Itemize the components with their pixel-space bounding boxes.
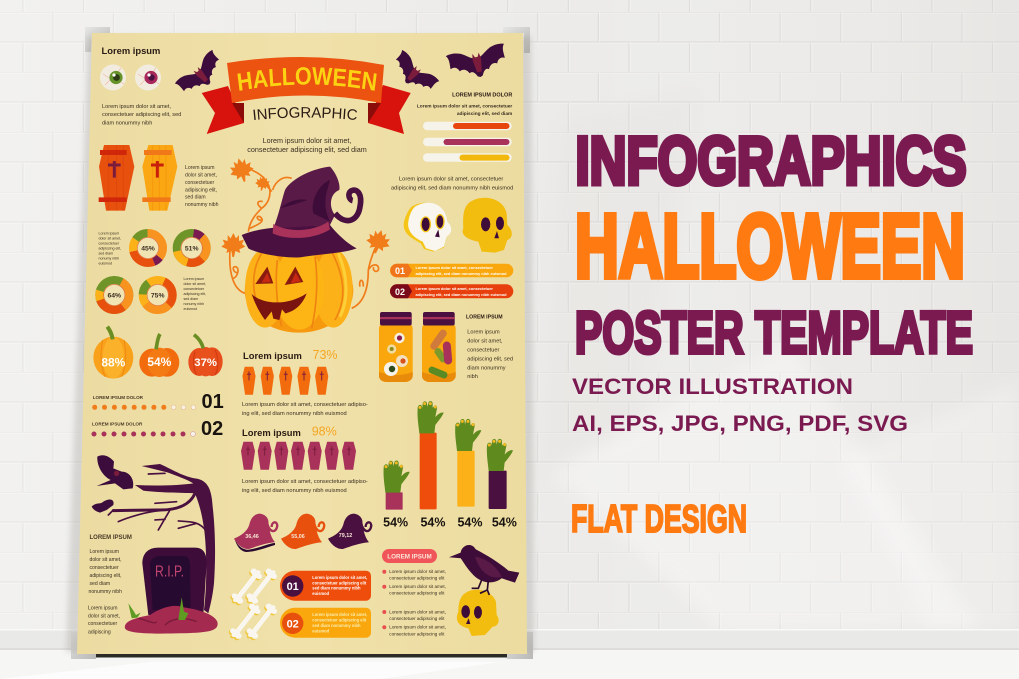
donut caption right: sed diam — [184, 297, 198, 301]
pumpkin 54%: 54% — [147, 355, 172, 369]
poster shadow — [66, 36, 534, 652]
subtitle body text: Lorem ipsum dolor sit amet, — [263, 136, 351, 145]
donut caption left: Lorem ipsum — [98, 232, 119, 236]
jar text: diam nonummy — [467, 365, 506, 371]
maple leaves — [221, 155, 393, 257]
crow on skull — [449, 545, 519, 636]
info pill 02: 02 — [395, 287, 405, 297]
pumpkin body — [245, 247, 353, 333]
bullets — [382, 570, 386, 629]
witch hat stats — [234, 514, 371, 552]
orange dots — [92, 405, 196, 410]
tree side text: nonummy nibh — [88, 589, 122, 595]
banner title text — [238, 67, 377, 91]
crow — [449, 545, 519, 595]
jar text: LOREM IPSUM — [466, 314, 503, 320]
info pill 01 — [390, 264, 513, 277]
section: 73% coffins: Lorem ipsum — [243, 350, 302, 361]
bar labels: 54% — [383, 516, 408, 530]
tree — [108, 464, 215, 613]
donut caption right: adipiscing elit, — [184, 292, 206, 296]
donut 45% — [133, 233, 163, 263]
bar labels: 54% — [492, 516, 517, 530]
numbered pill 01: euismod — [312, 591, 330, 596]
coffin text: sed diam — [185, 194, 206, 200]
bullet list panel — [382, 549, 446, 636]
donut caption left: consectetuer — [98, 242, 120, 246]
numbered pill 02 — [280, 608, 371, 638]
numbered pill 02: consectetuer adipiscing elit — [312, 617, 367, 622]
burial mound and grass — [125, 597, 218, 634]
section: 98% coffins: Lorem ipsum — [242, 427, 301, 438]
bones — [226, 566, 279, 642]
donut caption left: sed diam — [98, 252, 113, 256]
text above skulls — [391, 176, 513, 192]
donut caption right: euismod — [184, 307, 197, 311]
numbered pill 01: Lorem ipsum dolor sit amet, — [312, 575, 367, 580]
title banner — [202, 57, 411, 134]
jar text: adipiscing elit, sed — [467, 356, 513, 362]
donut labels — [107, 246, 199, 300]
numbered pill 02: Lorem ipsum dolor sit amet, — [312, 612, 367, 617]
intro text: diam nonummy nibh — [102, 120, 152, 126]
hat 36,46 — [234, 514, 277, 552]
tree side text: consectetuer — [90, 565, 119, 571]
numbered pill 02: sed diam nonummy nibh — [312, 623, 361, 628]
coffin text: nonummy nibh — [185, 202, 219, 208]
jar text — [466, 314, 513, 380]
tree with bats and gravestone — [92, 455, 218, 634]
tree side text: Lorem ipsum — [90, 549, 119, 555]
numbered pill 01: sed diam nonummy nibh — [312, 586, 361, 591]
info pill 02: Lorem ipsum dolor sit amet, consectetuer — [416, 286, 493, 291]
bar labels: 54% — [457, 516, 482, 530]
jar text: consectetuer — [467, 347, 499, 353]
yellow skull — [463, 198, 512, 253]
bullet list panel: LOREM IPSUM — [387, 554, 432, 560]
eyeball magenta — [135, 64, 161, 90]
top-right progress panel — [417, 93, 512, 162]
tree side text: dolor sit amet, — [90, 557, 122, 563]
section: 73% coffins: ing elit, sed diam nonummy nibh euismod — [242, 411, 347, 417]
red coffin — [99, 145, 134, 211]
vines and main pumpkin with witch hat — [221, 155, 393, 333]
donut caption right: Lorem ipsum — [184, 277, 204, 281]
numbered pill 02: euismod — [312, 628, 330, 634]
section: 98% coffins — [241, 425, 368, 494]
donut caption right: consectetuer — [184, 287, 205, 291]
donut labels: 75% — [151, 292, 165, 300]
top-right progress panel: Lorem ipsum dolor sit amet, consectetuer — [417, 104, 512, 110]
eyeball green — [100, 64, 126, 90]
bullet list panel: Lorem ipsum dolor sit amet, — [389, 609, 446, 614]
info pill 02: adipiscing elit, sed diam nonummy nibh euismod — [416, 292, 507, 297]
intro text: consectetuer adipiscing elit, sed — [102, 112, 181, 118]
intro text: Lorem ipsum dolor sit amet, — [102, 104, 171, 110]
bar labels: 54% — [420, 516, 445, 530]
numbered pill 01 — [280, 571, 371, 601]
donut caption left: euismod — [98, 262, 112, 266]
orange coffin row — [242, 367, 328, 395]
donut caption right: dolor sit amet, — [184, 282, 206, 286]
info pill 01: Lorem ipsum dolor sit amet, consectetuer — [416, 265, 493, 270]
donut caption left: nonumy nibh — [98, 256, 119, 260]
bullet list panel: Lorem ipsum dolor sit amet, — [389, 584, 446, 589]
banner title text: HALLOWEEN — [238, 67, 377, 91]
tree side text: consectetuer — [88, 621, 117, 627]
text above skulls: adipiscing elit, sed diam nonummy nibh euismod — [391, 186, 513, 192]
vines — [230, 170, 379, 308]
donut caption left: dolor sit amet, — [98, 236, 121, 240]
witch hat — [242, 167, 361, 257]
donut centres — [104, 237, 202, 306]
bullet list panel: consectetuer adipiscing elit — [389, 631, 445, 636]
tree side text — [88, 535, 132, 636]
flat design label: FLAT DESIGN — [571, 498, 747, 541]
yellow skull — [457, 590, 499, 636]
coffin text: Lorem ipsum — [185, 165, 214, 171]
banner subtitle: INFOGRAPHIC — [253, 107, 357, 120]
gravestone — [142, 548, 207, 615]
donut caption left — [98, 232, 121, 266]
witch hat stats: 36,46 — [245, 534, 259, 540]
jar with fingers — [422, 312, 456, 382]
pumpkin face — [252, 267, 307, 320]
donut 64% — [99, 280, 129, 310]
icon: bat left — [174, 49, 228, 101]
gravestone: R.I.P. — [155, 564, 184, 581]
tree side text: LOREM IPSUM — [90, 535, 132, 541]
tree side text: dolor sit amet, — [88, 614, 120, 620]
tree side text: adipiscing — [88, 630, 111, 636]
numbered pill 01: 01 — [287, 581, 299, 593]
dotted rating rows: LOREM IPSUM DOLOR — [92, 422, 143, 426]
bars — [386, 433, 507, 510]
intro text — [102, 104, 181, 126]
dotted rating rows: 01 — [202, 391, 224, 413]
donut labels: 51% — [185, 246, 199, 252]
subtitle body text — [247, 136, 367, 154]
top-left heading and eyes — [100, 45, 181, 126]
coffin text: dolor sit amet, — [185, 172, 217, 178]
coffin text: adipiscing elit, — [185, 188, 217, 194]
magenta coffin row — [241, 442, 356, 470]
coffin text: consectetuer — [185, 180, 214, 186]
skulls — [404, 198, 512, 253]
icon: bat middle right — [387, 49, 440, 99]
bat on branch — [92, 455, 133, 513]
bullet list panel: Lorem ipsum dolor sit amet, — [389, 625, 446, 630]
coffins panel — [99, 145, 219, 211]
hat 55,06 — [281, 514, 324, 549]
specimen jars — [379, 312, 513, 382]
bullet list panel: consectetuer adipiscing elit — [389, 591, 445, 596]
dotted rating rows — [92, 391, 224, 440]
section: 73% coffins: Lorem ipsum dolor sit amet, consectetuer adipiso- — [242, 402, 368, 408]
section: 73% coffins: 73% — [312, 348, 338, 362]
pumpkin 88%: 88% — [101, 356, 126, 370]
small pumpkins with percentages — [93, 327, 223, 379]
subtitle: file formats: AI, EPS, JPG, PNG, PDF, SVG — [572, 411, 908, 436]
dotted rating rows: LOREM IPSUM DOLOR — [93, 395, 144, 400]
baseboard and floor — [0, 629, 1019, 679]
tree side text: adipiscing elit, — [90, 573, 122, 579]
tree side text: Lorem ipsum — [88, 606, 117, 612]
subtitle body text: consectetuer adipiscing elit, sed diam — [247, 145, 367, 154]
donut caption right — [184, 277, 206, 311]
section: 98% coffins: 98% — [312, 425, 337, 439]
pumpkin 37%: 37% — [194, 357, 217, 369]
section: 73% coffins — [242, 348, 368, 417]
info pill 02 — [390, 284, 513, 298]
bullet list panel: consectetuer adipiscing elit — [389, 576, 445, 581]
bullet list panel: Lorem ipsum dolor sit amet, — [389, 569, 446, 574]
zombie hand bar chart — [383, 401, 517, 530]
hat 79,12 — [328, 514, 371, 549]
white skull — [404, 203, 451, 252]
progress bars — [423, 122, 512, 162]
top-right progress panel: adipiscing elit, sed diam — [457, 111, 512, 117]
banner subtitle — [253, 107, 357, 120]
numbered pill 02: 02 — [287, 618, 299, 630]
top-right progress panel: LOREM IPSUM DOLOR — [452, 93, 512, 99]
section: 98% coffins: ing elit, sed diam nonummy nibh euismod — [242, 488, 347, 494]
top-left heading and eyes: Lorem ipsum — [102, 45, 160, 56]
magenta dots — [92, 432, 195, 436]
donut labels: 45% — [141, 246, 155, 252]
donut 75% — [143, 280, 173, 310]
icon: bat far right — [446, 43, 510, 83]
yellow coffin — [142, 145, 177, 211]
section: 98% coffins: Lorem ipsum dolor sit amet, consectetuer adipiso- — [242, 479, 368, 485]
text above skulls: Lorem ipsum dolor sit amet, consectetuer — [399, 176, 503, 182]
jar text: dolor sit amet, — [467, 339, 503, 345]
bullet list panel: consectetuer adipiscing elit — [389, 616, 445, 621]
poster clips — [71, 27, 533, 659]
poster sheet — [77, 33, 527, 654]
witch hat stats: 55,06 — [291, 534, 305, 540]
jar with eyes — [379, 312, 413, 382]
donut caption left: adipiscing elit, — [98, 246, 121, 250]
donut 51% — [177, 233, 207, 263]
info pill 01: adipiscing elit, sed diam nonummy nibh euismod — [416, 271, 507, 276]
tree side text: sed diam — [90, 581, 110, 587]
dotted rating rows: 02 — [201, 418, 223, 440]
coffin text — [185, 165, 219, 208]
hands — [384, 401, 513, 493]
donut labels: 64% — [107, 292, 121, 300]
bar labels — [383, 516, 517, 530]
subtitle: vector illustration: VECTOR ILLUSTRATION — [572, 374, 853, 399]
jar text: Lorem ipsum — [467, 330, 500, 336]
witch hat stats: 79,12 — [339, 533, 352, 539]
info pill 01: 01 — [395, 266, 405, 276]
donut charts — [99, 233, 207, 310]
numbered pill 01: consectetuer adipiscing elit — [312, 580, 367, 585]
donut caption right: nonumy nibh — [184, 302, 204, 306]
jar text: nibh — [467, 374, 478, 380]
